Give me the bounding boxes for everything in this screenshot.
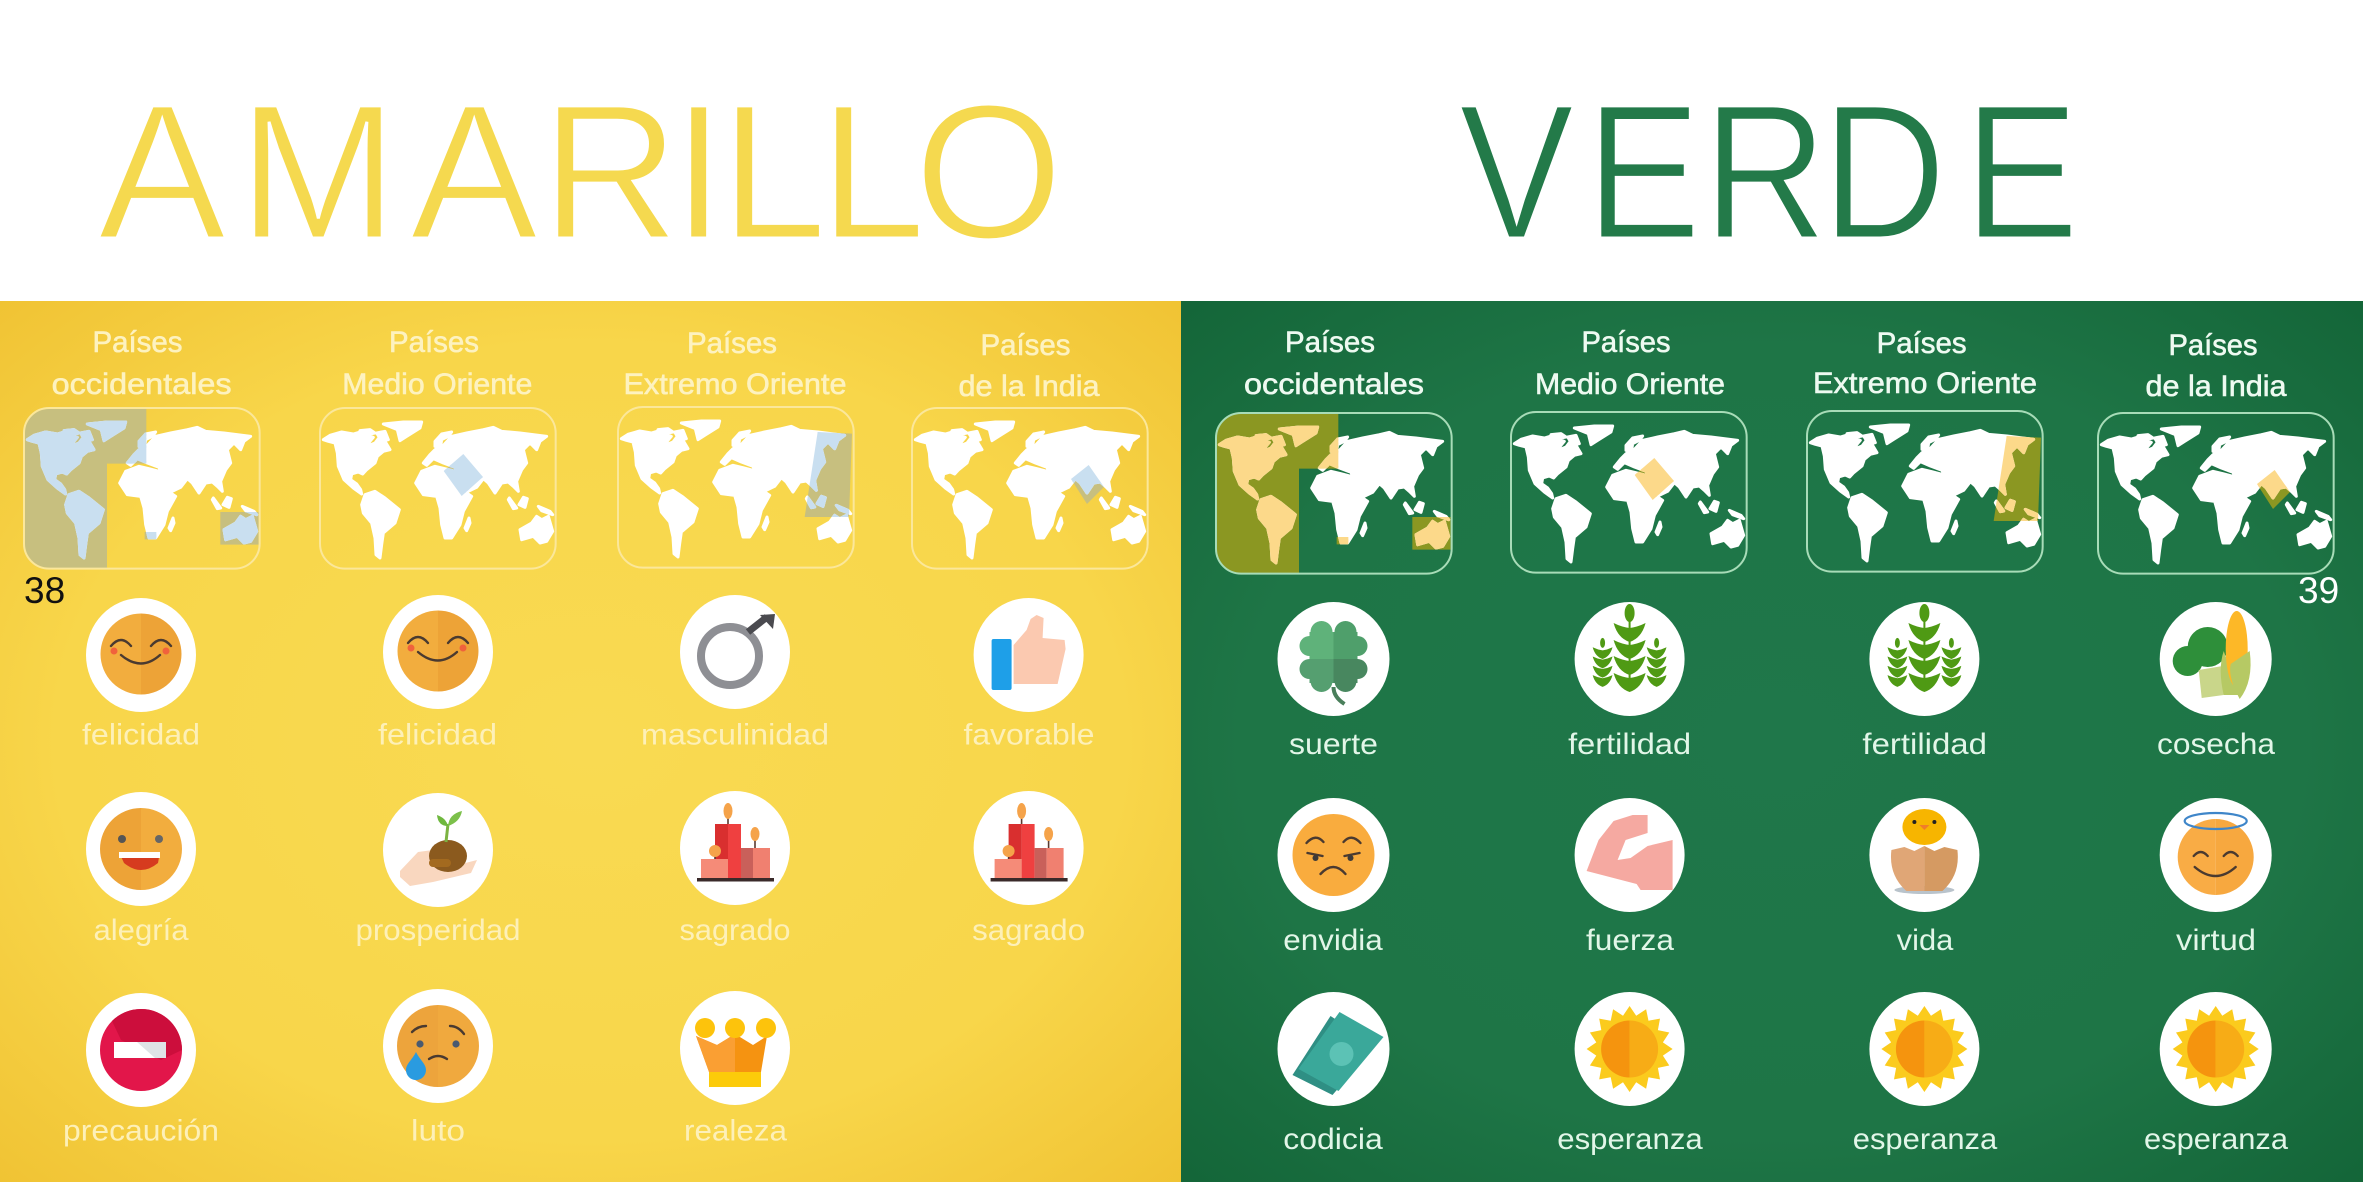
item: fuerza: fuerza [1586,924,1674,957]
column heading: Países Extremo Oriente (verde): Países [1877,327,1967,360]
item: luto: luto [411,1114,465,1148]
column heading: Países Extremo Oriente (verde): Extremo Oriente [1813,367,2037,400]
item: felicidad (Medio Oriente, amarillo) [378,595,497,752]
item: fertilidad (Extremo Oriente, verde): fertilidad [1862,728,1987,761]
column heading: Países de la India (amarillo): Países [980,329,1070,362]
column heading: Países occidentales (verde) [1244,326,1424,401]
item: esperanza (India): esperanza [2144,1123,2288,1156]
column heading: Países de la India (amarillo) [958,329,1100,403]
item: alegría: alegría [94,914,189,947]
item: codicia: codicia [1283,1123,1383,1156]
item: felicidad (Medio Oriente, amarillo): felicidad [378,718,497,752]
column heading: Países de la India (verde): de la India [2146,370,2287,403]
item: precaución: precaución [63,1114,219,1148]
item: suerte [1278,602,1390,761]
world map: India (verde) [2098,413,2334,574]
item: esperanza (Medio Oriente) [1557,992,1703,1156]
item: realeza: realeza [684,1114,787,1148]
column heading: Países de la India (verde): Países [2168,329,2258,362]
world map: India (amarillo) [912,408,1148,569]
column heading: Países de la India (amarillo): de la India [958,370,1100,403]
world map: Extremo Oriente (amarillo) [618,407,854,568]
item: masculinidad [641,595,829,752]
column heading: Países Medio Oriente (amarillo) [342,326,532,401]
column heading: Países Medio Oriente (amarillo): Países [389,326,479,359]
item: esperanza (Extremo Oriente): esperanza [1853,1123,1998,1156]
panel: green background [1181,301,2363,1182]
item: favorable: favorable [964,718,1094,752]
column heading: Países occidentales (verde): occidentales [1244,368,1424,401]
item: vida [1869,798,1979,957]
column heading: Países Extremo Oriente (verde) [1813,327,2037,400]
item: fertilidad (Extremo Oriente, verde) [1862,602,1987,761]
column heading: Países Medio Oriente (verde) [1535,326,1725,401]
item: prosperidad: prosperidad [356,914,520,947]
panel: yellow background [0,301,1181,1182]
item: envidia: envidia [1283,924,1383,957]
item: masculinidad: masculinidad [641,718,829,752]
item: felicidad (occidentales, amarillo) [82,598,200,752]
world map: occidentales (amarillo) [24,408,260,569]
page number 39: 39 [2298,570,2339,611]
title: VERDE: VERDE [1459,65,2079,279]
page number 38: 38 [24,570,65,611]
item: precaución [63,993,219,1148]
item: fertilidad (Medio Oriente, verde) [1568,602,1691,761]
item: felicidad (occidentales, amarillo): felicidad [82,718,200,752]
column heading: Países de la India (verde) [2146,329,2287,403]
item: alegría [86,792,196,947]
item: luto [383,989,493,1148]
column heading: Países Medio Oriente (verde): Medio Oriente [1535,368,1725,401]
world map: occidentales (verde) [1216,413,1452,574]
item: favorable [964,598,1094,752]
column heading: Países Extremo Oriente (amarillo): Extremo Oriente [624,368,846,401]
item: prosperidad [356,793,520,947]
column heading: Países Extremo Oriente (amarillo) [624,327,846,401]
item: envidia [1278,798,1390,957]
item: realeza [680,991,790,1148]
item: codicia [1278,992,1390,1156]
item: virtud [2160,798,2272,957]
item: sagrado (India): sagrado [972,914,1085,947]
item: sagrado (Extremo Oriente): sagrado [680,914,790,947]
item: suerte: suerte [1289,728,1378,761]
item: esperanza (Extremo Oriente) [1853,992,1998,1156]
world map: Extremo Oriente (verde) [1807,411,2043,572]
item: vida: vida [1897,924,1954,957]
item: fuerza [1575,798,1685,957]
item: sagrado (India) [972,791,1085,947]
column heading: Países Extremo Oriente (amarillo): Países [687,327,777,360]
item: fertilidad (Medio Oriente, verde): fertilidad [1568,728,1691,761]
item: cosecha [2157,602,2275,761]
column heading: Países Medio Oriente (amarillo): Medio Oriente [342,368,532,401]
column heading: Países occidentales (verde): Países [1285,326,1375,359]
world map: Medio Oriente (amarillo) [320,408,556,569]
item: esperanza (Medio Oriente): esperanza [1557,1123,1703,1156]
world map: Medio Oriente (verde) [1511,412,1747,573]
item: sagrado (Extremo Oriente) [680,791,790,947]
item: esperanza (India) [2144,992,2288,1156]
column heading: Países occidentales (amarillo): occidentales [52,368,232,401]
column heading: Países occidentales (amarillo): Países [92,326,182,359]
item: cosecha: cosecha [2157,728,2275,761]
item: virtud: virtud [2176,924,2256,957]
title: AMARILLO: AMARILLO [98,64,1063,279]
column heading: Países Medio Oriente (verde): Países [1582,326,1670,359]
column heading: Países occidentales (amarillo) [52,326,232,401]
